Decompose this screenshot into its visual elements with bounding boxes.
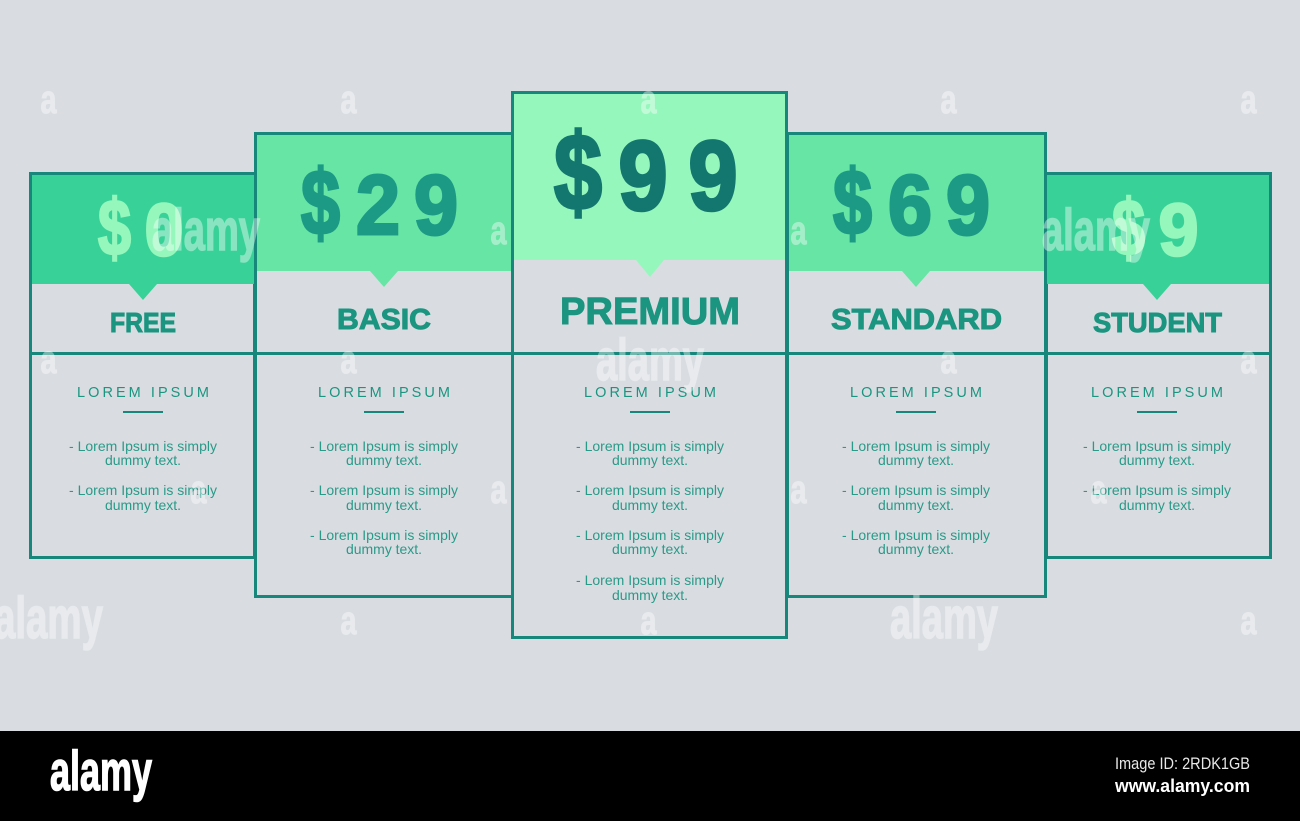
watermarks: a bbox=[940, 78, 957, 122]
watermarks: a bbox=[340, 599, 357, 643]
features: premium bbox=[576, 385, 724, 603]
features: basic: dummy text. bbox=[346, 497, 422, 513]
features: free: dummy text. bbox=[105, 452, 181, 468]
panel: standard plan bbox=[788, 134, 1046, 596]
features: student: - Lorem Ipsum is simply bbox=[1083, 482, 1231, 498]
price header: free: $ bbox=[98, 182, 131, 272]
watermarks: a bbox=[640, 78, 657, 122]
watermarks bbox=[0, 78, 1257, 651]
panel: basic plan bbox=[256, 134, 512, 596]
watermarks: a bbox=[190, 468, 207, 512]
watermarks: a bbox=[1240, 599, 1257, 643]
features: basic: dummy text. bbox=[346, 452, 422, 468]
watermarks: alamy bbox=[1042, 198, 1150, 263]
price header: premium: 9 bbox=[688, 120, 738, 230]
features: premium: dummy text. bbox=[612, 497, 688, 513]
features: basic: - Lorem Ipsum is simply bbox=[310, 482, 458, 498]
price header: free: 0 bbox=[144, 188, 184, 272]
plan name: premium: PREMIUM bbox=[560, 291, 740, 333]
watermarks: a bbox=[640, 599, 657, 643]
features: standard: - Lorem Ipsum is simply bbox=[842, 482, 990, 498]
plan name: basic: BASIC bbox=[337, 304, 431, 336]
website: www.alamy.com bbox=[1114, 776, 1250, 796]
plan name: student: STUDENT bbox=[1093, 307, 1222, 338]
price header: premium: $ bbox=[554, 111, 602, 232]
features: free: - Lorem Ipsum is simply bbox=[69, 438, 217, 454]
watermarks: alamy bbox=[152, 198, 260, 263]
features: premium: - Lorem Ipsum is simply bbox=[576, 482, 724, 498]
features: student bbox=[1083, 385, 1231, 513]
features: standard: dummy text. bbox=[878, 541, 954, 557]
features: premium: dummy text. bbox=[612, 452, 688, 468]
watermarks: a bbox=[1240, 78, 1257, 122]
features: basic bbox=[310, 385, 458, 557]
features: standard: LOREM IPSUM bbox=[850, 385, 982, 401]
watermarks: a bbox=[490, 468, 507, 512]
features: premium: dummy text. bbox=[612, 541, 688, 557]
features: basic: - Lorem Ipsum is simply bbox=[310, 527, 458, 543]
features: student: dummy text. bbox=[1119, 452, 1195, 468]
watermarks: alamy bbox=[596, 328, 704, 393]
price header: free bbox=[32, 175, 254, 300]
price header: basic: $ bbox=[301, 152, 340, 254]
features: student: LOREM IPSUM bbox=[1091, 385, 1223, 401]
features: standard: - Lorem Ipsum is simply bbox=[842, 438, 990, 454]
features: standard: dummy text. bbox=[878, 452, 954, 468]
watermarks: alamy bbox=[890, 586, 998, 651]
panel: free plan bbox=[30, 174, 254, 558]
features: basic: dummy text. bbox=[346, 541, 422, 557]
watermarks: a bbox=[490, 209, 507, 253]
watermarks: a bbox=[790, 468, 807, 512]
watermarks: a bbox=[940, 338, 957, 382]
plan name: standard: STANDARD bbox=[831, 304, 1002, 336]
price header: standard bbox=[789, 135, 1044, 287]
features: free: dummy text. bbox=[105, 497, 181, 513]
price header: student: 9 bbox=[1158, 188, 1198, 272]
watermarks: a bbox=[340, 78, 357, 122]
panel: student plan bbox=[1046, 174, 1270, 558]
price header: basic: 2 bbox=[356, 158, 400, 252]
price header: premium bbox=[514, 94, 785, 277]
features: premium: - Lorem Ipsum is simply bbox=[576, 438, 724, 454]
watermarks: a bbox=[790, 209, 807, 253]
watermarks: a bbox=[340, 338, 357, 382]
price header: student: $ bbox=[1112, 182, 1145, 272]
price header: standard: $ bbox=[833, 152, 872, 254]
features: standard bbox=[842, 385, 990, 557]
features: free: - Lorem Ipsum is simply bbox=[69, 482, 217, 498]
price header: standard: 6 bbox=[888, 158, 932, 252]
price header: basic bbox=[257, 135, 511, 287]
price header: basic: 9 bbox=[414, 158, 458, 252]
features: premium: - Lorem Ipsum is simply bbox=[576, 527, 724, 543]
features: standard: dummy text. bbox=[878, 497, 954, 513]
image id: Image ID: 2RDK1GB bbox=[1115, 754, 1250, 773]
price header: standard: 9 bbox=[946, 158, 990, 252]
panel: premium plan bbox=[512, 92, 786, 638]
features: free bbox=[69, 385, 217, 513]
watermarks: a bbox=[40, 78, 57, 122]
footer bar bbox=[0, 731, 1300, 821]
features: student: dummy text. bbox=[1119, 497, 1195, 513]
plan name: free: FREE bbox=[110, 307, 176, 338]
price header: premium: 9 bbox=[618, 120, 668, 230]
watermarks: a bbox=[1240, 338, 1257, 382]
features: standard: - Lorem Ipsum is simply bbox=[842, 527, 990, 543]
watermarks: a bbox=[1090, 468, 1107, 512]
footer logo: alamy bbox=[50, 739, 152, 802]
features: basic: LOREM IPSUM bbox=[318, 385, 450, 401]
watermarks: a bbox=[40, 338, 57, 382]
features: premium: dummy text. bbox=[612, 587, 688, 603]
features: free: LOREM IPSUM bbox=[77, 385, 209, 401]
features: premium: LOREM IPSUM bbox=[584, 385, 716, 401]
features: premium: - Lorem Ipsum is simply bbox=[576, 572, 724, 588]
features: student: - Lorem Ipsum is simply bbox=[1083, 438, 1231, 454]
features: basic: - Lorem Ipsum is simply bbox=[310, 438, 458, 454]
price header: student bbox=[1047, 175, 1269, 300]
